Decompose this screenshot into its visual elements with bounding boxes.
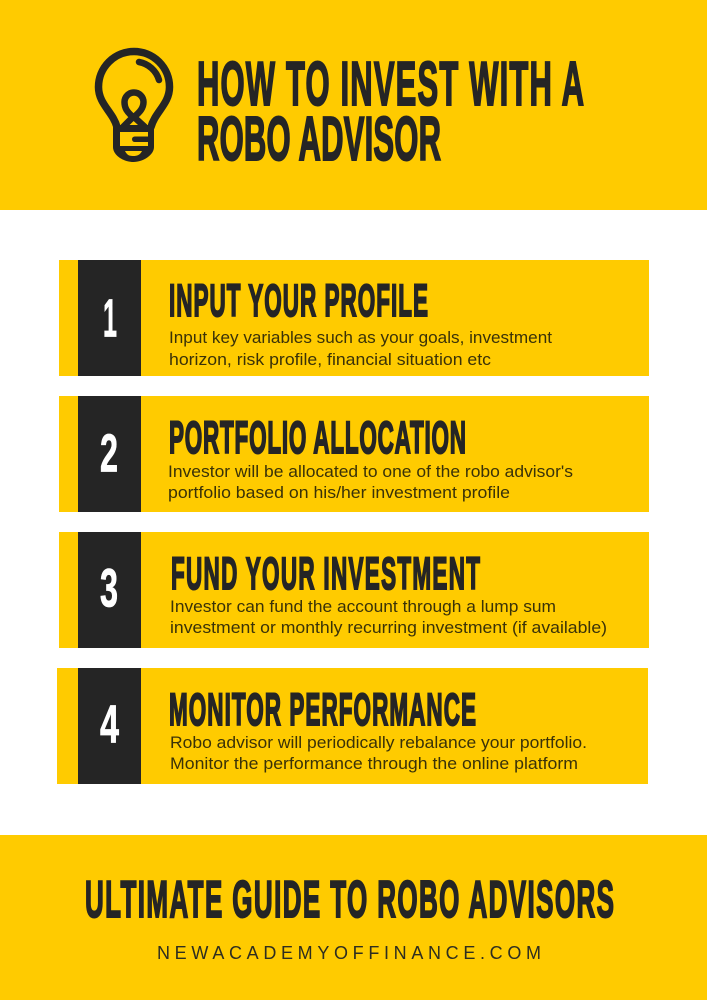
step 3 heading: FUND YOUR INVESTMENT	[171, 549, 480, 599]
step 3 description	[170, 597, 607, 637]
title: HOW TO INVEST WITH A	[197, 51, 584, 119]
step 1 description: horizon, risk profile, financial situation etc	[169, 350, 492, 369]
panel: step 1: 1	[103, 288, 117, 348]
header band	[0, 0, 707, 210]
website address: NEWACADEMYOFFINANCE.COM	[157, 943, 541, 963]
step 1 description	[169, 328, 552, 369]
step 2 description: Investor will be allocated to one of the robo advisor's	[168, 462, 573, 481]
step 2 description: portfolio based on his/her investment profile	[168, 483, 510, 502]
footer band	[0, 835, 707, 1000]
step 1 description: Input key variables such as your goals, investment	[169, 328, 552, 347]
step 4 heading: MONITOR PERFORMANCE	[169, 685, 476, 735]
step number 3: 3	[100, 558, 118, 618]
icon: light bulb	[98, 52, 170, 162]
panel: step 4	[57, 668, 648, 784]
panel: step 1	[59, 260, 649, 376]
step 4 description: Robo advisor will periodically rebalance your portfolio.	[170, 733, 587, 752]
panel: step 3	[59, 532, 649, 648]
step 3 description: investment or monthly recurring investment (if available)	[170, 618, 607, 637]
step number 4: 4	[100, 694, 119, 754]
footer heading: ULTIMATE GUIDE TO ROBO ADVISORS	[85, 870, 614, 928]
step 2 description	[168, 462, 573, 502]
step 4 description	[170, 733, 587, 773]
panel: step 2	[59, 396, 649, 512]
step number 2: 2	[100, 424, 118, 484]
step 4 description: Monitor the performance through the online platform	[170, 754, 578, 773]
title: ROBO ADVISOR	[197, 106, 441, 174]
step 3 description: Investor can fund the account through a lump sum	[170, 597, 556, 616]
title	[197, 51, 584, 174]
step 1 heading: INPUT YOUR PROFILE	[169, 276, 428, 326]
step 2 heading: PORTFOLIO ALLOCATION	[169, 413, 466, 463]
